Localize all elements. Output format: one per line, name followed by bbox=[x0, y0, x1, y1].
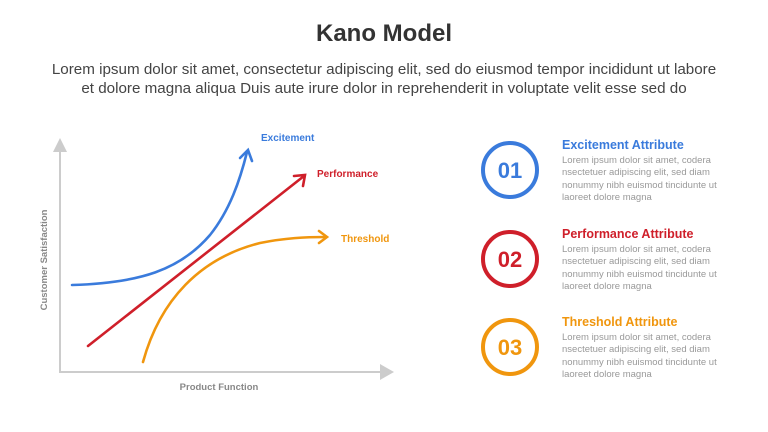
circle 01: 01 bbox=[498, 158, 522, 183]
curve: performance bbox=[88, 175, 305, 346]
subtitle: et dolore magna aliqua Duis aute irure dolor in reprehenderit in voluptate velit esse sed do bbox=[81, 80, 687, 97]
text 3: Lorem ipsum dolor sit amet, codera nsectetuer adipiscing elit, sed diam nonummy nibh euismod tincidunte ut laoreet dolore magna bbox=[562, 332, 717, 380]
y axis bbox=[53, 138, 67, 373]
heading 1: Excitement Attribute bbox=[562, 138, 684, 152]
heading 2: Performance Attribute bbox=[562, 227, 694, 241]
circle 01 bbox=[481, 141, 539, 199]
subtitle: Lorem ipsum dolor sit amet, consectetur adipiscing elit, sed do eiusmod tempor incididunt ut labore bbox=[52, 61, 716, 78]
text 2: Lorem ipsum dolor sit amet, codera nsectetuer adipiscing elit, sed diam nonummy nibh euismod tincidunte ut laoreet dolore magna bbox=[562, 244, 717, 292]
curve: excitement bbox=[72, 150, 252, 285]
subtitle bbox=[52, 61, 716, 97]
x axis bbox=[59, 364, 394, 380]
circle 03: 03 bbox=[498, 335, 522, 360]
label: excitement: Excitement bbox=[261, 133, 315, 144]
circle 03 bbox=[481, 318, 539, 376]
title: Kano Model bbox=[316, 20, 452, 47]
curve: threshold bbox=[143, 231, 327, 362]
circle 02: 02 bbox=[498, 247, 522, 272]
y axis label: Customer Satisfaction bbox=[39, 209, 50, 310]
x axis label: Product Function bbox=[180, 382, 259, 393]
heading 3: Threshold Attribute bbox=[562, 315, 678, 329]
label: performance: Performance bbox=[317, 169, 379, 180]
text 1: Lorem ipsum dolor sit amet, codera nsectetuer adipiscing elit, sed diam nonummy nibh euismod tincidunte ut laoreet dolore magna bbox=[562, 155, 717, 203]
chart bbox=[39, 133, 394, 393]
label: threshold: Threshold bbox=[341, 234, 389, 245]
circle 02 bbox=[481, 230, 539, 288]
